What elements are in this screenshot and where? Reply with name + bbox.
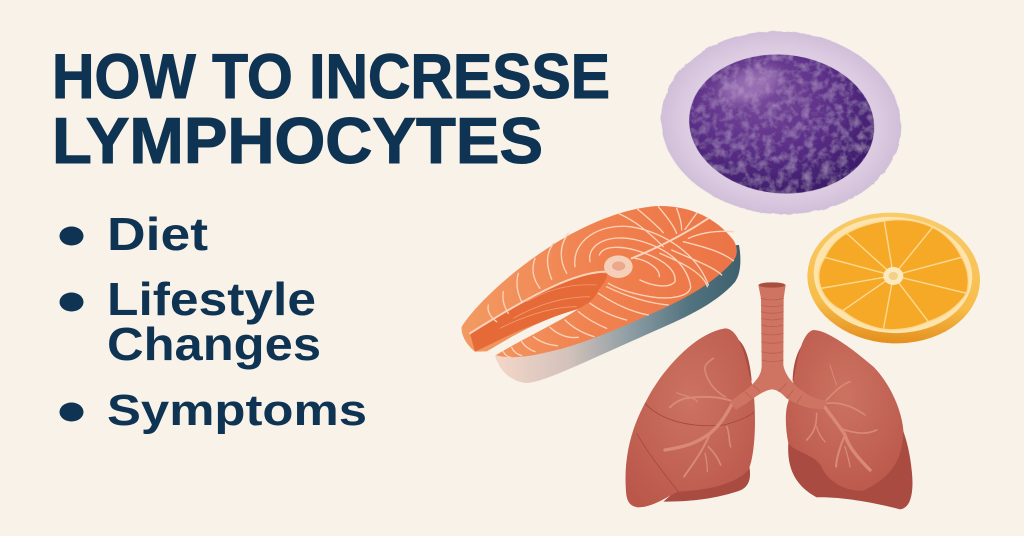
icon: lymphocyte cell (655, 23, 907, 222)
bullet: Lifestyle Changes: Lifestyle (107, 273, 316, 325)
bronchial tree (665, 358, 877, 477)
gap between lobes (487, 309, 578, 356)
icon: salmon steak (462, 206, 740, 383)
right lung (786, 330, 903, 491)
bullet: Lifestyle Changes (60, 273, 321, 370)
salmon centre bone (604, 255, 633, 278)
salmon flesh (462, 206, 737, 357)
orange centre (883, 267, 903, 285)
bullet list (60, 208, 367, 435)
salmon skin (495, 245, 740, 383)
lung lobe shadows (663, 338, 912, 509)
icon: orange slice (804, 208, 983, 348)
left lung (626, 328, 755, 507)
flesh lines (470, 207, 733, 357)
title (52, 42, 610, 177)
lobe fissures (637, 403, 754, 492)
trachea and main bronchi (730, 282, 827, 410)
bullet: Diet (60, 208, 208, 260)
title: LYMPHOCYTES (52, 104, 543, 177)
bullet: Symptoms: Symptoms (107, 386, 367, 435)
bullet: Lifestyle Changes: Changes (107, 318, 321, 370)
underside shadow of the notch (470, 273, 607, 352)
orange segments (819, 220, 968, 330)
bullet: Diet: Diet (107, 208, 208, 260)
title: HOW TO INCRESSE (52, 42, 610, 112)
trachea rings (745, 298, 802, 403)
icon: lungs (626, 282, 912, 509)
